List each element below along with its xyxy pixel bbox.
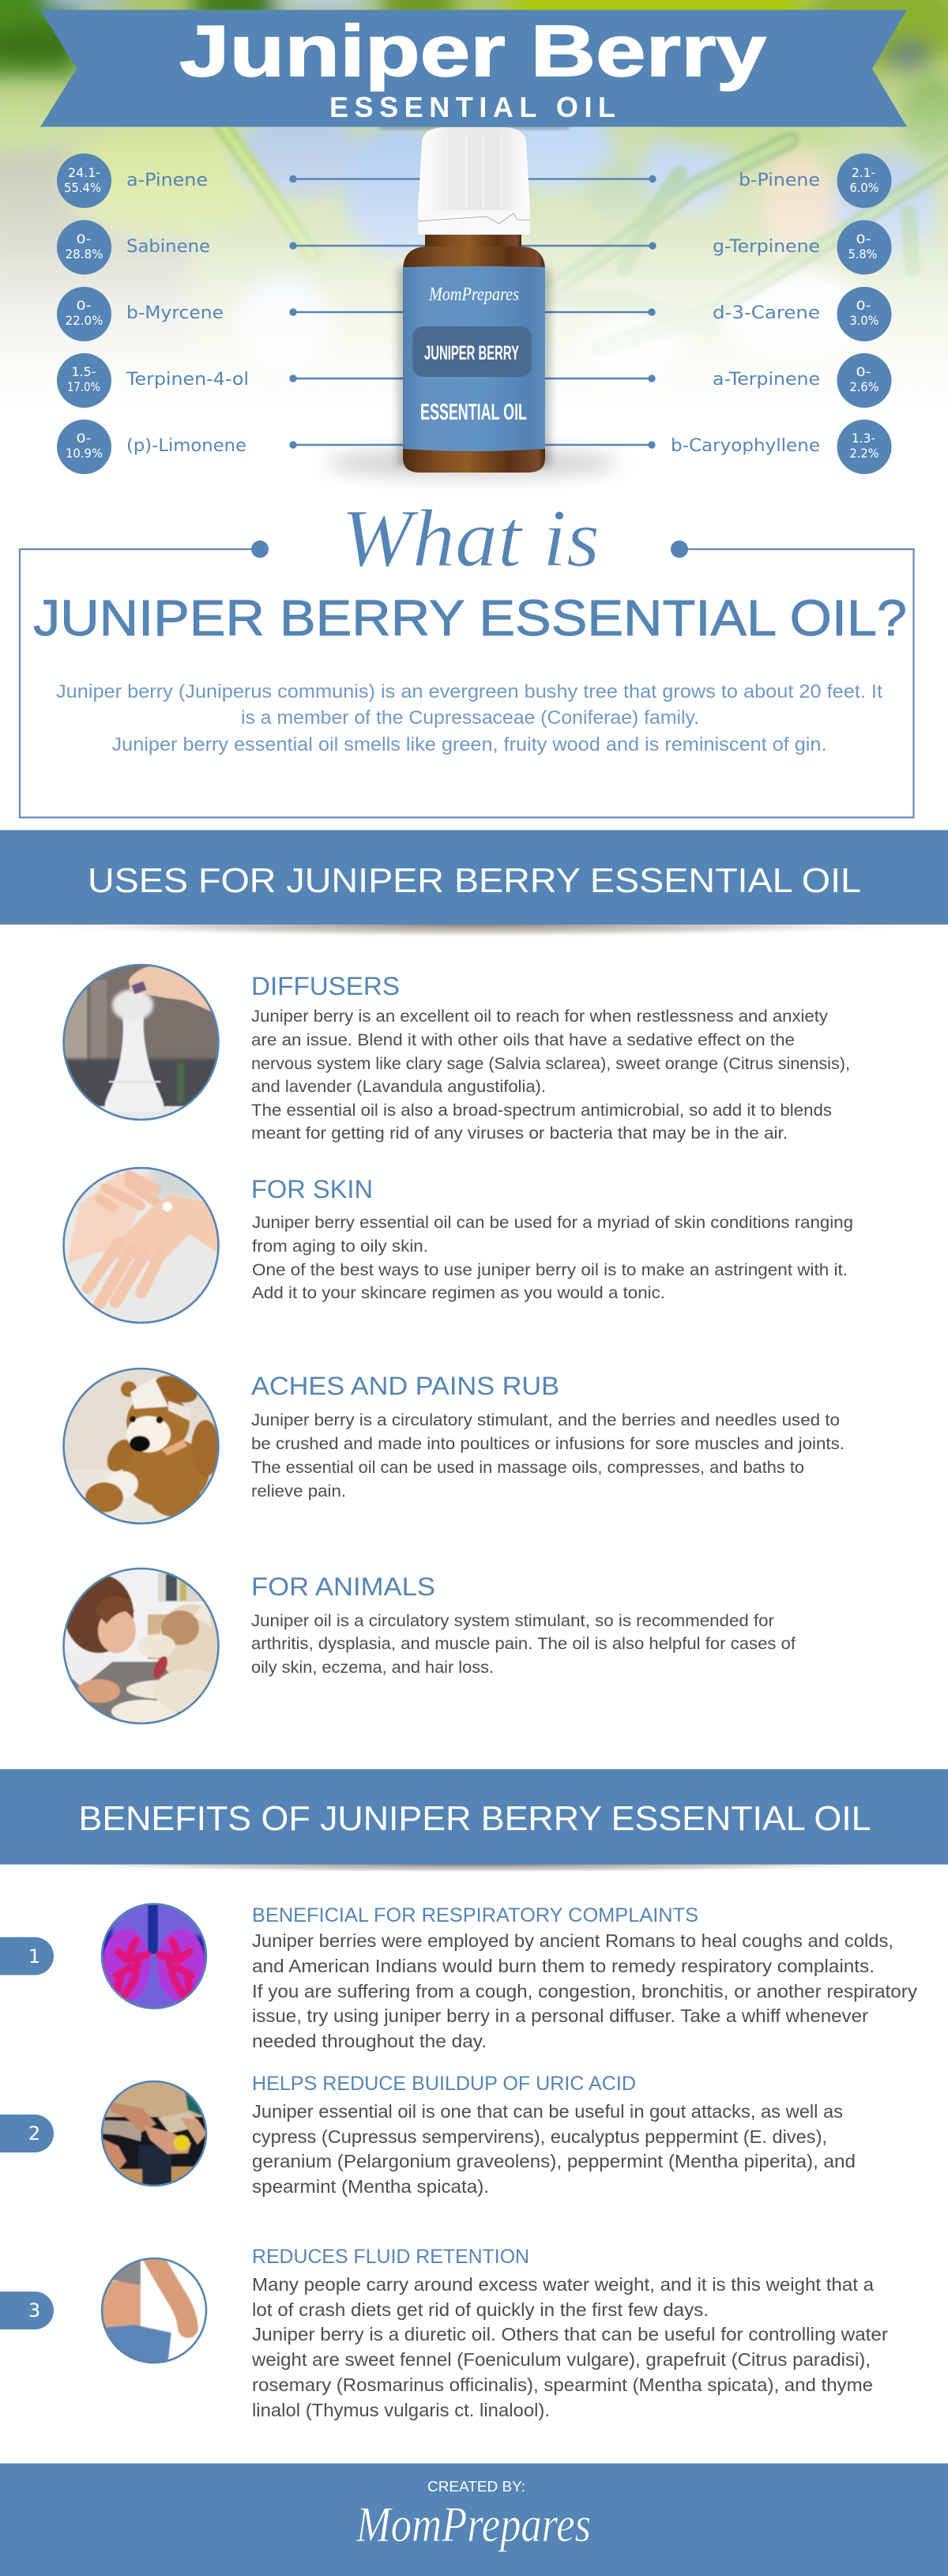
compound: (p)-Limonene: 10.9% xyxy=(66,446,103,461)
photo: hands with stress ball xyxy=(101,2081,207,2189)
body text: If you are suffering from a cough, congestion, bronchitis, or another respiratory xyxy=(252,1981,918,2002)
compound: a-Terpinene: 2.6% xyxy=(850,379,878,394)
compound: b-Pinene: b-Pinene xyxy=(739,171,820,190)
number tab 2: 2 xyxy=(28,2122,40,2145)
compound: b-Myrcene xyxy=(57,287,224,341)
body text: One of the best ways to use juniper berry oil is to make an astringent with it. xyxy=(252,1261,848,1279)
bottle label brand: MomPrepares xyxy=(428,284,519,305)
compound: g-Terpinene xyxy=(713,220,891,275)
body text: oily skin, eczema, and hair loss. xyxy=(251,1659,494,1677)
body text: Juniper berry is a circulatory stimulant, and the berries and needles used to xyxy=(251,1411,840,1429)
section band: benefits: BENEFITS OF JUNIPER BERRY ESSENTIAL OIL xyxy=(79,1799,871,1838)
compound: a-Terpinene xyxy=(713,353,891,408)
compound: a-Pinene: a-Pinene xyxy=(126,171,208,190)
heading: FOR SKIN xyxy=(251,1175,373,1203)
compound: Terpinen-4-ol: 1.5- xyxy=(71,364,96,379)
body text: Juniper berry is a diuretic oil. Others that can be useful for controlling water xyxy=(252,2324,888,2344)
heading: HELPS REDUCE BUILDUP OF URIC ACID xyxy=(252,2073,636,2095)
body text: and American Indians would burn them to remedy respiratory complaints. xyxy=(252,1956,875,1976)
body text: relieve pain. xyxy=(251,1482,346,1501)
body text: Juniper oil is a circulatory system stimulant, so is recommended for xyxy=(251,1612,774,1630)
body text: rosemary (Rosmarinus officinalis), spearmint (Mentha spicata), and thyme xyxy=(252,2375,873,2395)
number tab 2 xyxy=(0,2115,54,2152)
number tab 1 xyxy=(0,1938,54,1975)
intro text xyxy=(56,681,882,755)
use: for animals xyxy=(63,1569,796,1725)
photo: waist and loose jeans xyxy=(101,2252,207,2367)
heading: REDUCES FLUID RETENTION xyxy=(252,2246,529,2268)
section band: benefits xyxy=(0,1769,948,1873)
body text: nervous system like clary sage (Salvia sclarea), sweet orange (Citrus sinensis), xyxy=(251,1055,850,1073)
subtitle: Essential Oil: ESSENTIAL OIL xyxy=(329,91,615,123)
compound: a-Pinene xyxy=(57,153,208,208)
body text: geranium (Pelargonium graveolens), peppermint (Mentha piperita), and xyxy=(252,2151,856,2171)
compound: b-Caryophyllene: 1.3- xyxy=(852,431,875,446)
body text: spearmint (Mentha spicata). xyxy=(252,2176,489,2197)
compound: d-3-Carene: 3.0% xyxy=(850,313,878,328)
body text: are an issue. Blend it with other oils that have a sedative effect on the xyxy=(251,1031,795,1049)
title banner xyxy=(40,9,907,130)
left compounds list xyxy=(57,153,249,474)
body text xyxy=(251,1612,796,1677)
bottle label plate: JUNIPER BERRY xyxy=(424,342,519,364)
compound: g-Terpinene: g-Terpinene xyxy=(713,237,820,257)
bottle label essential oil: ESSENTIAL OIL xyxy=(420,400,527,425)
connector lines from compounds to bottle xyxy=(291,176,656,447)
compound: Terpinen-4-ol xyxy=(57,353,249,408)
compound: a-Terpinene: 0- xyxy=(856,364,871,379)
body text: Juniper berries were employed by ancient Romans to heal coughs and colds, xyxy=(252,1930,893,1951)
body text: and lavender (Lavandula angustifolia). xyxy=(251,1078,546,1096)
intro text: Juniper berry essential oil smells like green, fruity wood and is reminiscent of gin. xyxy=(112,734,826,755)
compound: b-Myrcene: b-Myrcene xyxy=(126,303,224,323)
body text xyxy=(251,1411,845,1501)
compound: (p)-Limonene xyxy=(57,420,246,474)
use: diffusers xyxy=(63,964,850,1143)
body text: meant for getting rid of any viruses or bacteria that may be in the air. xyxy=(251,1124,788,1143)
intro text: Juniper berry (Juniperus communis) is an evergreen bushy tree that grows to about 20 feet. It xyxy=(56,681,882,702)
body text xyxy=(251,2274,888,2420)
compound: b-Caryophyllene: b-Caryophyllene xyxy=(671,436,820,456)
heading: JUNIPER BERRY ESSENTIAL OIL? xyxy=(33,589,907,646)
body text xyxy=(252,1930,918,2051)
compound: b-Myrcene: 22.0% xyxy=(65,313,103,328)
heading script: What is: What is xyxy=(341,493,600,584)
heading: FOR ANIMALS xyxy=(251,1572,435,1601)
body text xyxy=(252,1214,853,1302)
number tab 3 xyxy=(0,2292,54,2329)
compound: g-Terpinene: 5.8% xyxy=(848,247,877,262)
panel: what is xyxy=(20,493,913,817)
number tab 3: 3 xyxy=(28,2299,40,2322)
body text: weight are sweet fennel (Foeniculum vulgare), grapefruit (Citrus paradisi), xyxy=(251,2349,871,2370)
body text: Juniper essential oil is one that can be useful in gout attacks, as well as xyxy=(252,2101,843,2122)
body text: be crushed and made into poultices or infusions for sore muscles and joints. xyxy=(251,1435,845,1453)
body text: Many people carry around excess water weight, and it is this weight that a xyxy=(252,2274,874,2295)
number tab 1: 1 xyxy=(28,1945,40,1968)
body text xyxy=(252,2101,856,2197)
compound: Sabinene xyxy=(57,220,210,275)
compound: a-Terpinene: a-Terpinene xyxy=(713,370,820,390)
brand name: MomPrepares xyxy=(356,2496,591,2552)
photo: bandaged teddy bear xyxy=(63,1368,220,1525)
body text: Add it to your skincare regimen as you would a tonic. xyxy=(252,1284,665,1302)
photo: diffuser xyxy=(63,964,220,1122)
heading: BENEFICIAL FOR RESPIRATORY COMPLAINTS xyxy=(252,1904,698,1926)
compound: g-Terpinene: 0- xyxy=(856,232,871,247)
photo: lungs xyxy=(101,1904,207,2009)
heading: DIFFUSERS xyxy=(251,972,400,1000)
photo: hands applying cream xyxy=(63,1167,225,1324)
body text xyxy=(251,1007,850,1143)
title: Juniper Berry: Juniper Berry xyxy=(179,11,766,92)
section band: uses: USES FOR JUNIPER BERRY ESSENTIAL OIL xyxy=(88,861,861,900)
body text: linalol (Thymus vulgaris ct. linalool). xyxy=(252,2400,550,2420)
compound: a-Pinene: 24.1- xyxy=(68,165,100,180)
use: aches and pains rub xyxy=(63,1368,845,1525)
compound: d-3-Carene: 0- xyxy=(856,298,871,313)
compound: Terpinen-4-ol: Terpinen-4-ol xyxy=(126,370,249,390)
bottle label plate xyxy=(412,326,532,377)
panel frame xyxy=(20,549,913,817)
compound: Sabinene: 0- xyxy=(76,232,92,247)
intro text: is a member of the Cupressaceae (Coniferae) family. xyxy=(241,707,699,729)
benefit 1: respiratory xyxy=(0,1904,918,2051)
essential oil bottle xyxy=(326,127,619,477)
right compounds list xyxy=(671,153,891,474)
body text: The essential oil is also a broad-spectrum antimicrobial, so add it to blends xyxy=(251,1102,832,1120)
body text: needed throughout the day. xyxy=(252,2031,487,2051)
photo: woman and dog xyxy=(63,1569,225,1725)
compound: b-Pinene: 6.0% xyxy=(850,180,878,195)
compound: Terpinen-4-ol: 17.0% xyxy=(67,379,100,394)
compound: (p)-Limonene: (p)-Limonene xyxy=(126,436,246,456)
heading: ACHES AND PAINS RUB xyxy=(251,1372,559,1400)
body text: Juniper berry essential oil can be used for a myriad of skin conditions ranging xyxy=(252,1214,853,1232)
compound: (p)-Limonene: 0- xyxy=(76,431,92,446)
compound: b-Myrcene: 0- xyxy=(76,298,92,313)
body text: arthritis, dysplasia, and muscle pain. The oil is also helpful for cases of xyxy=(251,1635,796,1653)
body text: lot of crash diets get rid of quickly in the first few days. xyxy=(252,2299,709,2320)
compound: b-Caryophyllene: 2.2% xyxy=(850,446,878,461)
compound: b-Pinene: 2.1- xyxy=(852,165,875,180)
created by label: CREATED BY: xyxy=(427,2479,525,2495)
footer xyxy=(0,2464,948,2576)
background photo: juniper branch and berries xyxy=(0,0,948,403)
section band: uses xyxy=(0,830,948,938)
body text: cypress (Cupressus sempervirens), eucalyptus peppermint (E. dives), xyxy=(252,2126,827,2147)
body text: Juniper berry is an excellent oil to reach for when restlessness and anxiety xyxy=(251,1007,829,1026)
compound: Sabinene: Sabinene xyxy=(126,237,210,257)
compound: b-Caryophyllene xyxy=(671,420,891,474)
body text: from aging to oily skin. xyxy=(252,1237,428,1256)
benefit 2: uric acid xyxy=(0,2073,856,2197)
compound: a-Pinene: 55.4% xyxy=(64,180,101,195)
benefit 3: fluid retention xyxy=(0,2246,888,2420)
use: for skin xyxy=(63,1167,853,1324)
compound: d-3-Carene: d-3-Carene xyxy=(713,303,820,323)
compound: b-Pinene xyxy=(739,153,891,208)
compound: d-3-Carene xyxy=(713,287,891,341)
frame dots xyxy=(251,540,688,558)
body text: The essential oil can be used in massage oils, compresses, and baths to xyxy=(251,1459,804,1477)
bottle cap xyxy=(418,127,530,235)
compound: Sabinene: 28.8% xyxy=(65,247,103,262)
body text: issue, try using juniper berry in a personal diffuser. Take a whiff whenever xyxy=(252,2005,868,2026)
